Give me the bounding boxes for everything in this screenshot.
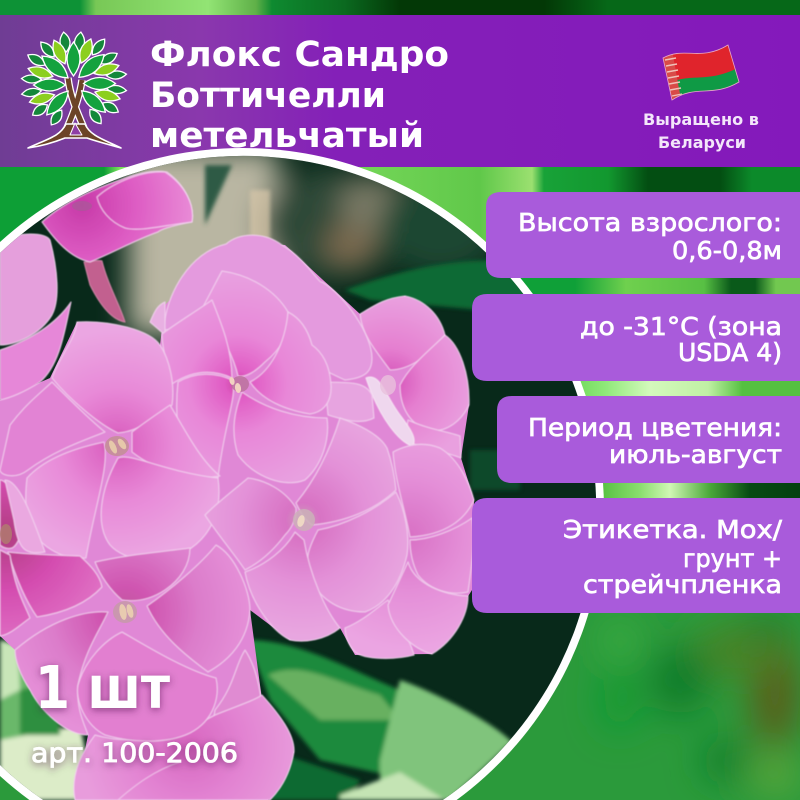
panel: frost hardiness [472,294,800,381]
central flower [162,271,331,483]
title: Флокс Сандро [150,35,449,75]
panel: height: 0,6-0,8м [672,236,782,265]
panel: flowering period: Период цветения: [528,413,782,442]
tree leaves [21,31,127,127]
quantity label: 1 шт [35,653,170,722]
panel: height [486,192,800,278]
title: Боттичелли [150,76,386,116]
top strip of background [0,0,800,16]
purple header band [0,15,800,167]
label: grown in Belarus: Выращено в [643,110,759,129]
flower mass underlay [0,245,474,800]
far left flower [0,480,102,636]
title: метельчатый [150,116,424,156]
panel: packaging: грунт + [683,544,782,573]
top bud flower [42,171,193,262]
panel: packaging: стрейчпленка [583,570,782,599]
bottom flower [74,650,294,800]
label: grown in Belarus [643,110,759,152]
white stem [366,377,414,446]
center lower flower [205,418,408,641]
photo circle: pink phlox flowers [0,148,604,800]
photo background [0,150,600,800]
panel: frost hardiness: USDA 4) [678,338,782,367]
stem of bud [84,261,125,322]
strip under header [0,166,800,266]
left upper flower [0,234,71,400]
left middle flower [0,322,220,560]
tree trunk [28,78,121,148]
panel: flowering period: июль-август [609,440,782,469]
logo: tree [21,31,127,148]
flower petals [0,171,474,800]
flower centers and stamens [0,201,396,623]
right upper flower [360,296,469,458]
panel: packaging [472,498,800,613]
title [150,35,449,156]
panel: flowering period [497,396,800,483]
article number: арт. 100-2006 [31,738,238,769]
lower left flower [15,545,250,741]
back petal of central flower [150,235,374,421]
panel: frost hardiness: до -31°C (зона [580,312,782,341]
panel: height: Высота взрослого: [518,208,782,237]
panel: packaging: Этикетка. Мох/ [563,515,783,544]
strip between panels 1 and 2 [500,276,800,296]
strip between panels 2 and 3 [570,379,800,399]
label: grown in Belarus: Беларуси [658,133,746,152]
icon: Belarus flag [662,44,740,101]
lower right flower [345,444,474,658]
strip between panels 3 and 4 [600,481,800,500]
